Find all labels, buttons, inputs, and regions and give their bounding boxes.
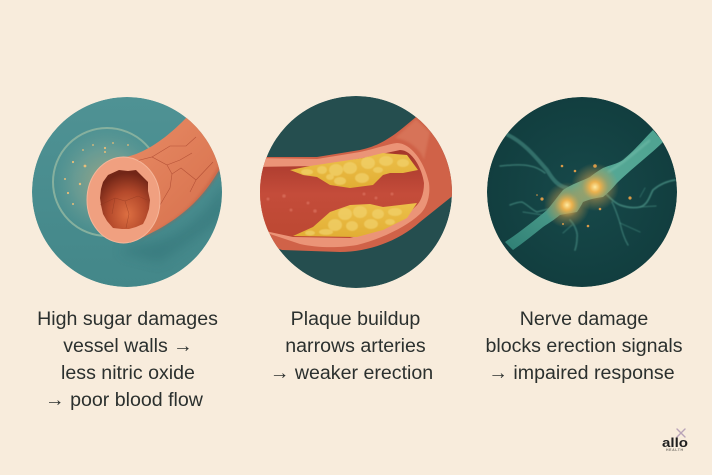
- text: nerve caption: [485, 308, 683, 384]
- text: nerve caption: → impaired response: [488, 362, 675, 384]
- nerve trunk: [505, 130, 663, 250]
- logo: allo health: [662, 429, 688, 452]
- nitric oxide ring with particles: [53, 128, 161, 236]
- sparks: [536, 164, 632, 227]
- bottom plaque: [293, 203, 417, 237]
- lumen: [255, 150, 424, 238]
- artery body: [255, 117, 460, 252]
- text: nerve caption: Nerve damage: [520, 308, 648, 330]
- artery tube: [86, 118, 220, 244]
- text: high sugar caption: [37, 308, 218, 411]
- logo: allo health: allo: [662, 435, 688, 450]
- text: high sugar caption: High sugar damages: [37, 308, 218, 330]
- nerve branches: [500, 135, 675, 250]
- text: plaque caption: Plaque buildup: [291, 308, 420, 330]
- text: plaque caption: narrows arteries: [285, 335, 426, 357]
- panel: damaged nerve illustration: [487, 97, 677, 287]
- lumen: [100, 170, 150, 229]
- panel: narrowed artery illustration: [255, 96, 460, 288]
- tube shadow: [136, 186, 222, 258]
- vessel opening rim: [87, 157, 160, 243]
- text: plaque caption: → weaker erection: [270, 362, 433, 384]
- icon: logo sparkle: [677, 429, 685, 437]
- text: high sugar caption: less nitric oxide: [61, 362, 195, 384]
- glowing synapse: upper: [571, 163, 619, 211]
- text: high sugar caption: → poor blood flow: [45, 389, 204, 411]
- blood cells specks: [266, 192, 394, 213]
- surface veins: [136, 137, 213, 205]
- artery wall: [255, 143, 429, 247]
- panel: damaged vessel illustration: [32, 97, 240, 287]
- top plaque: [290, 153, 418, 188]
- glowing synapse: lower: [544, 182, 590, 228]
- text: plaque caption: [270, 308, 433, 384]
- text: high sugar caption: vessel walls →: [63, 335, 193, 357]
- trunk highlight: [608, 140, 650, 172]
- logo: allo health: HEALTH: [666, 448, 683, 452]
- text: nerve caption: blocks erection signals: [485, 335, 683, 357]
